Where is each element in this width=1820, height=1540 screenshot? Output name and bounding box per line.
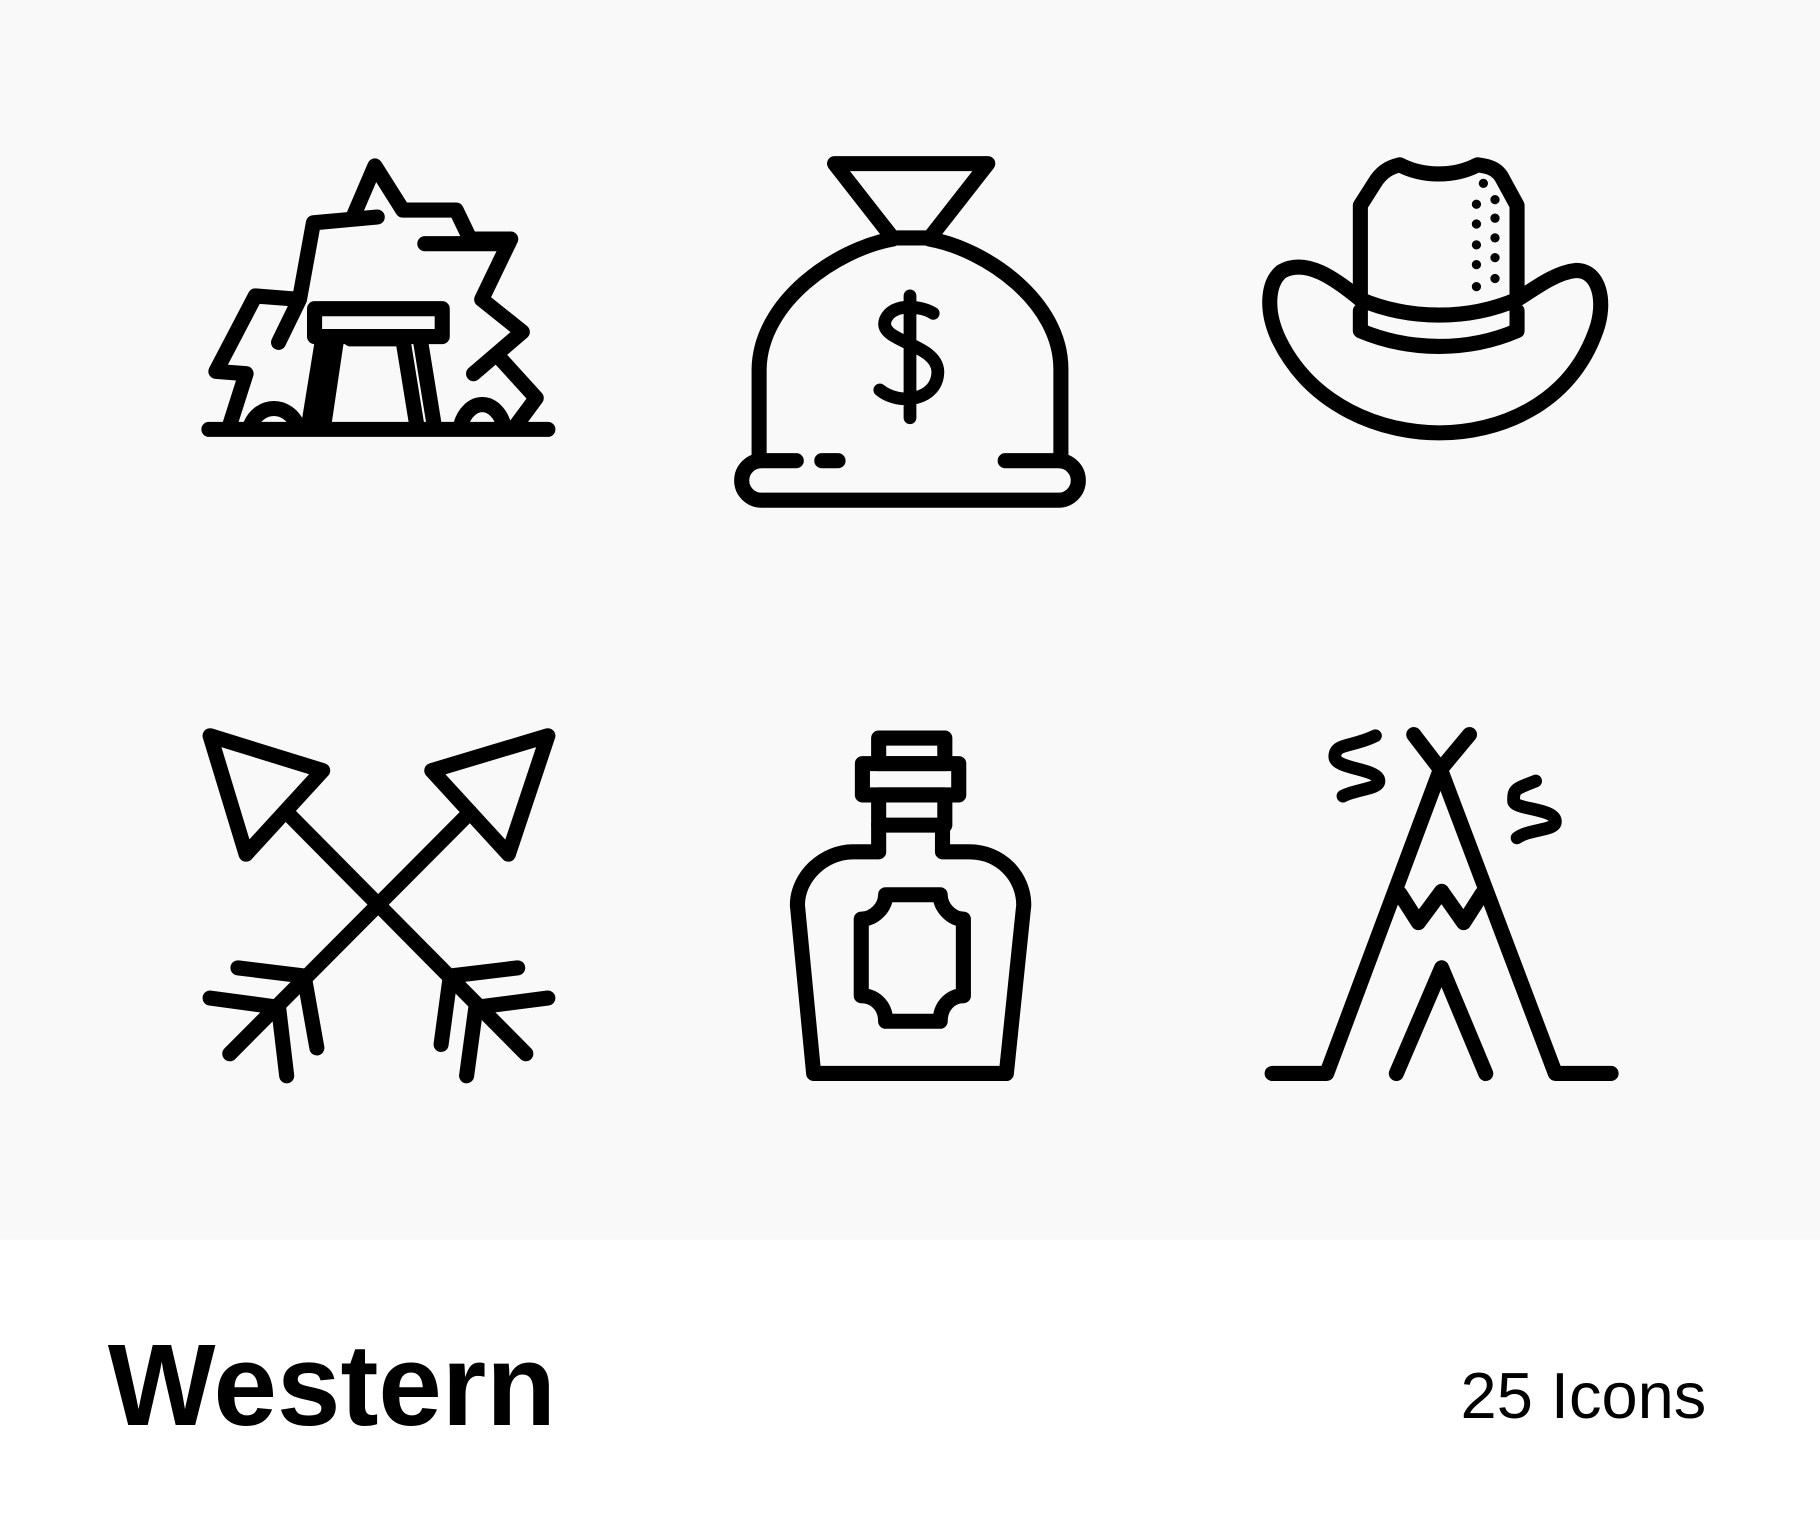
icon count: 25 Icons (1461, 1359, 1706, 1432)
icon: money bag (742, 164, 1078, 500)
title: Western (108, 1320, 556, 1450)
icon: crossed arrows (210, 736, 548, 1076)
icon: teepee (1272, 735, 1611, 1073)
icon: rock formation (209, 166, 548, 429)
icon: cowboy hat (1270, 165, 1601, 433)
icon: bottle (797, 738, 1024, 1073)
